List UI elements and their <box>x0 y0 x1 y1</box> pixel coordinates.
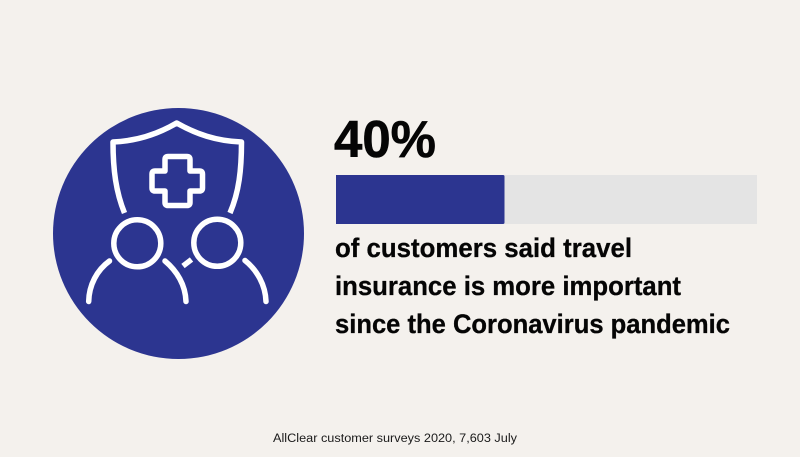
statistic: 40%: 40% <box>334 111 436 169</box>
description text: of customers said travel <box>335 233 632 263</box>
description text: since the Coronavirus pandemic <box>335 309 730 339</box>
icon: shield with two people in a circle <box>53 108 304 359</box>
description text <box>335 233 730 339</box>
progress bar <box>336 175 757 224</box>
source note: AllClear customer surveys 2020, 7,603 July <box>273 433 517 445</box>
description text: insurance is more important <box>335 271 681 301</box>
